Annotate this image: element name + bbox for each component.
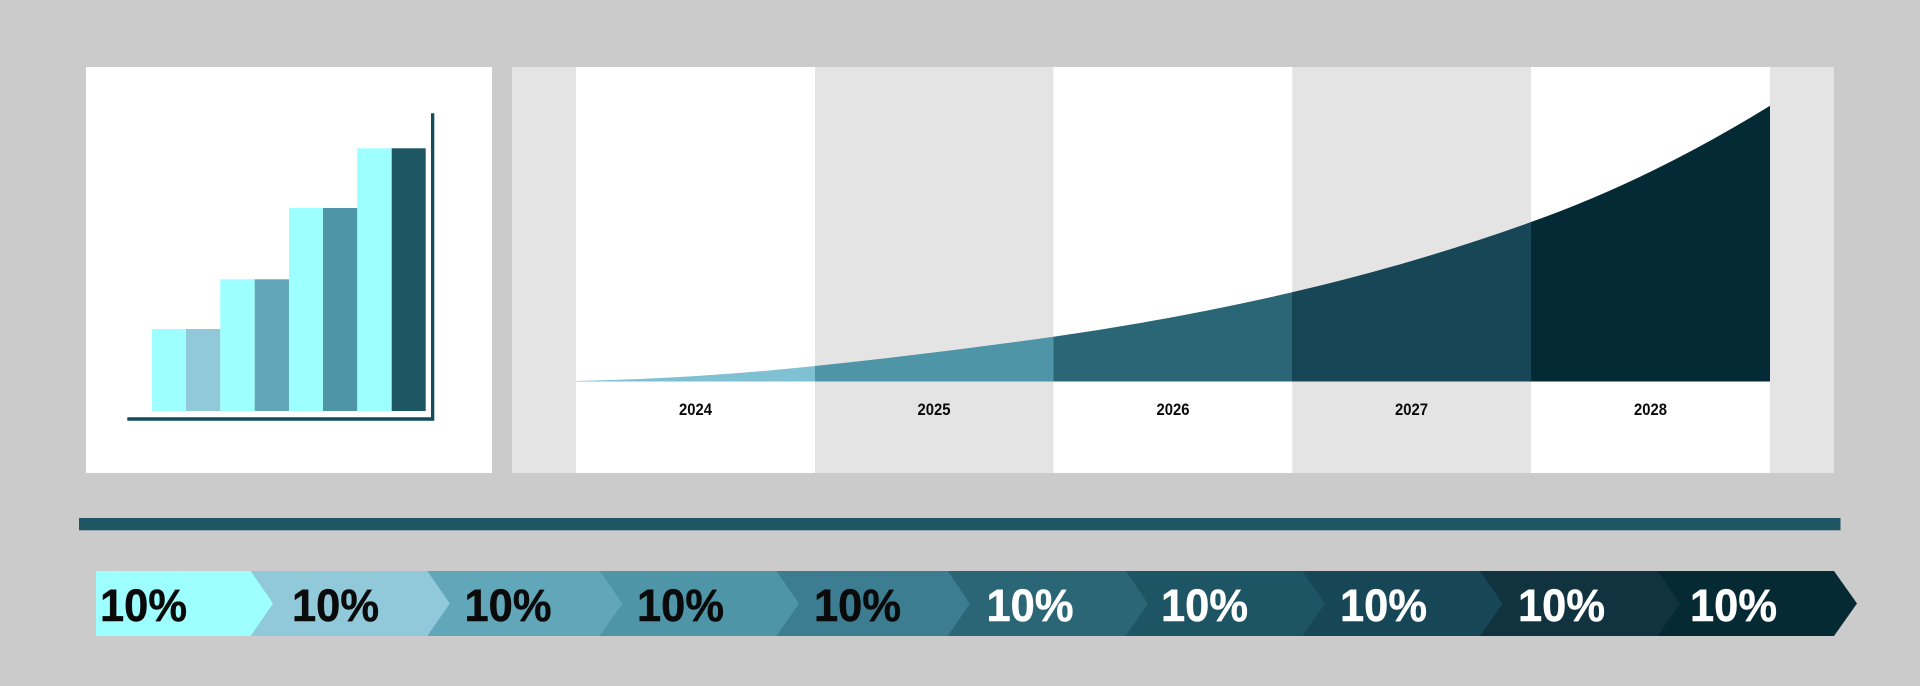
chevron 7 [1126, 571, 1325, 636]
panel: bar chart [86, 67, 492, 473]
chevron 4 [600, 571, 799, 636]
chevron percentage strip [96, 571, 1857, 636]
column 2025 [815, 337, 1054, 419]
chart axes [127, 113, 434, 421]
label 2024: 2024 [679, 400, 712, 419]
label 2025: 2025 [918, 400, 950, 419]
bar group 1 [152, 329, 220, 411]
label 2026: 2026 [1156, 400, 1190, 419]
chevron 5: 10% [814, 580, 901, 631]
area 2028 [1531, 106, 1770, 381]
chevron 10 [1658, 571, 1857, 636]
chevron 6 [948, 571, 1148, 636]
chevron 7: 10% [1161, 580, 1248, 631]
divider bar [79, 518, 1840, 530]
bar group 3 [289, 208, 357, 411]
label 2027: 2027 [1395, 400, 1428, 419]
area 2026 [1054, 292, 1292, 382]
chevron 8: 10% [1340, 580, 1427, 631]
chevron 10: 10% [1690, 580, 1777, 631]
area 2024 [576, 366, 815, 382]
chevron 4: 10% [637, 580, 724, 631]
chevron 3: 10% [464, 580, 552, 631]
chevron 9 [1480, 571, 1680, 636]
panel: timeline area chart [512, 67, 1834, 473]
bar group 2 [220, 279, 289, 411]
chevron 2: 10% [292, 580, 379, 631]
area 2025 [815, 337, 1054, 382]
chevron 5 [776, 571, 970, 636]
chevron 3 [427, 571, 622, 636]
chevron 1 [96, 571, 273, 636]
label 2028: 2028 [1634, 400, 1667, 419]
column 2026 [1054, 67, 1292, 473]
chevron 6: 10% [986, 580, 1074, 631]
column 2028 [1531, 67, 1770, 473]
chevron 2 [251, 571, 450, 636]
bar group 4 [357, 148, 426, 411]
area 2027 [1292, 222, 1531, 382]
column 2027 [1292, 222, 1531, 419]
column 2024 [576, 67, 815, 473]
chevron 8 [1302, 571, 1502, 636]
chevron 1: 10% [100, 580, 187, 631]
chevron 9: 10% [1518, 580, 1605, 631]
